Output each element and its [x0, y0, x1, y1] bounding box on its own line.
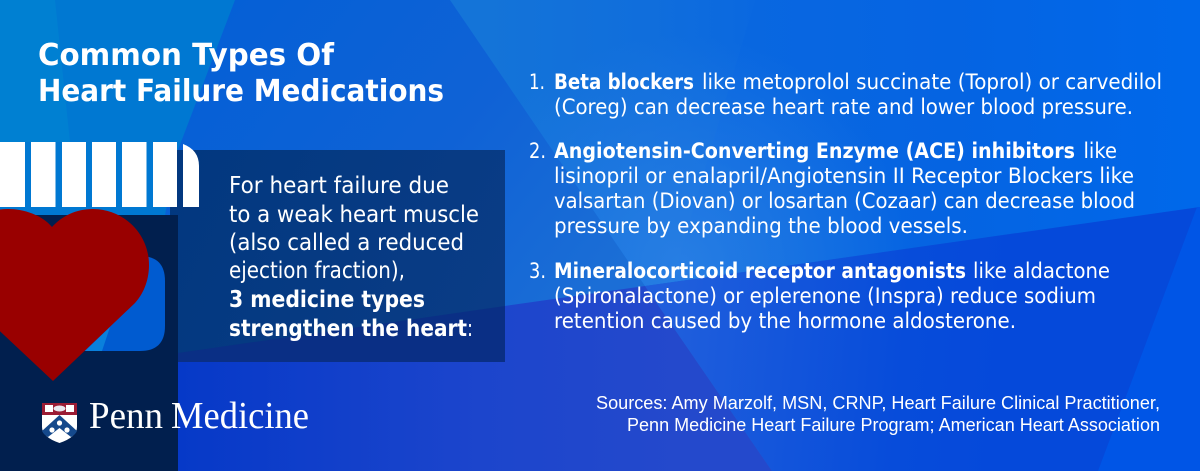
list item 1: beta blockers: like metoprolol succinate (Toprol) or carvedilol [702, 70, 1162, 94]
panel: navy sidebar [0, 215, 178, 471]
list item 3: mineralocorticoid receptor antagonists: retention caused by the hormone aldosterone. [554, 309, 1016, 333]
sources: Sources: Amy Marzolf, MSN, CRNP, Heart Failure Clinical Practitioner, [596, 393, 1160, 413]
logo wordmark: Penn [89, 395, 163, 437]
list item 2: ACE inhibitors: Angiotensin-Converting Enzyme (ACE) inhibitors [554, 139, 1075, 163]
text: intro paragraph: For heart failure due [229, 173, 449, 199]
list item 1: beta blockers [529, 70, 1162, 119]
list item 3: mineralocorticoid receptor antagonists: 3. [529, 259, 546, 283]
logo: Penn Medicine [42, 395, 309, 443]
list item 3: mineralocorticoid receptor antagonists: Mineralocorticoid receptor antagonists [554, 259, 966, 283]
list item 2: ACE inhibitors: pressure by expanding the blood vessels. [554, 214, 968, 238]
list item 3: mineralocorticoid receptor antagonists [529, 259, 1110, 333]
list: medication types [529, 70, 1162, 333]
list item 2: ACE inhibitors: lisinopril or enalapril/Angiotensin II Receptor Blockers like [554, 164, 1134, 188]
text: intro paragraph: strengthen the heart [229, 316, 467, 342]
title: Common Types Of [38, 38, 335, 73]
list item 2: ACE inhibitors: like [1084, 139, 1117, 163]
title: Heart Failure Medications [38, 74, 444, 109]
panel: intro callout [170, 150, 505, 362]
logo wordmark [89, 395, 309, 437]
text: intro paragraph: (also called a reduced [229, 230, 464, 256]
title [38, 38, 444, 109]
list item 2: ACE inhibitors: valsartan (Diovan) or losartan (Cozaar) can decrease blood [554, 189, 1135, 213]
logo wordmark: Medicine [171, 395, 309, 437]
list item 3: mineralocorticoid receptor antagonists: (Spironalactone) or eplerenone (Inspra) reduce sodium [554, 284, 1096, 308]
text: intro paragraph [229, 173, 479, 342]
text: intro paragraph: : [467, 316, 473, 342]
sources [596, 393, 1160, 435]
icon: pill bottle body [60, 256, 165, 351]
list item 1: beta blockers: 1. [529, 70, 545, 94]
list item 2: ACE inhibitors [529, 139, 1135, 238]
list item 2: ACE inhibitors: 2. [529, 139, 546, 163]
text: intro paragraph: to a weak heart muscle [229, 202, 479, 228]
icon: pill bottle cap [0, 142, 199, 207]
icon: heart [0, 209, 149, 381]
text: intro paragraph: ejection fraction), [229, 258, 405, 284]
icon: Penn shield [42, 403, 77, 443]
list item 3: mineralocorticoid receptor antagonists: like aldactone [973, 259, 1110, 283]
list item 1: beta blockers: (Coreg) can decrease heart rate and lower blood pressure. [554, 95, 1133, 119]
text: intro paragraph: 3 medicine types [229, 287, 425, 313]
list item 1: beta blockers: Beta blockers [554, 70, 694, 94]
sources: Penn Medicine Heart Failure Program; American Heart Association [627, 415, 1160, 435]
